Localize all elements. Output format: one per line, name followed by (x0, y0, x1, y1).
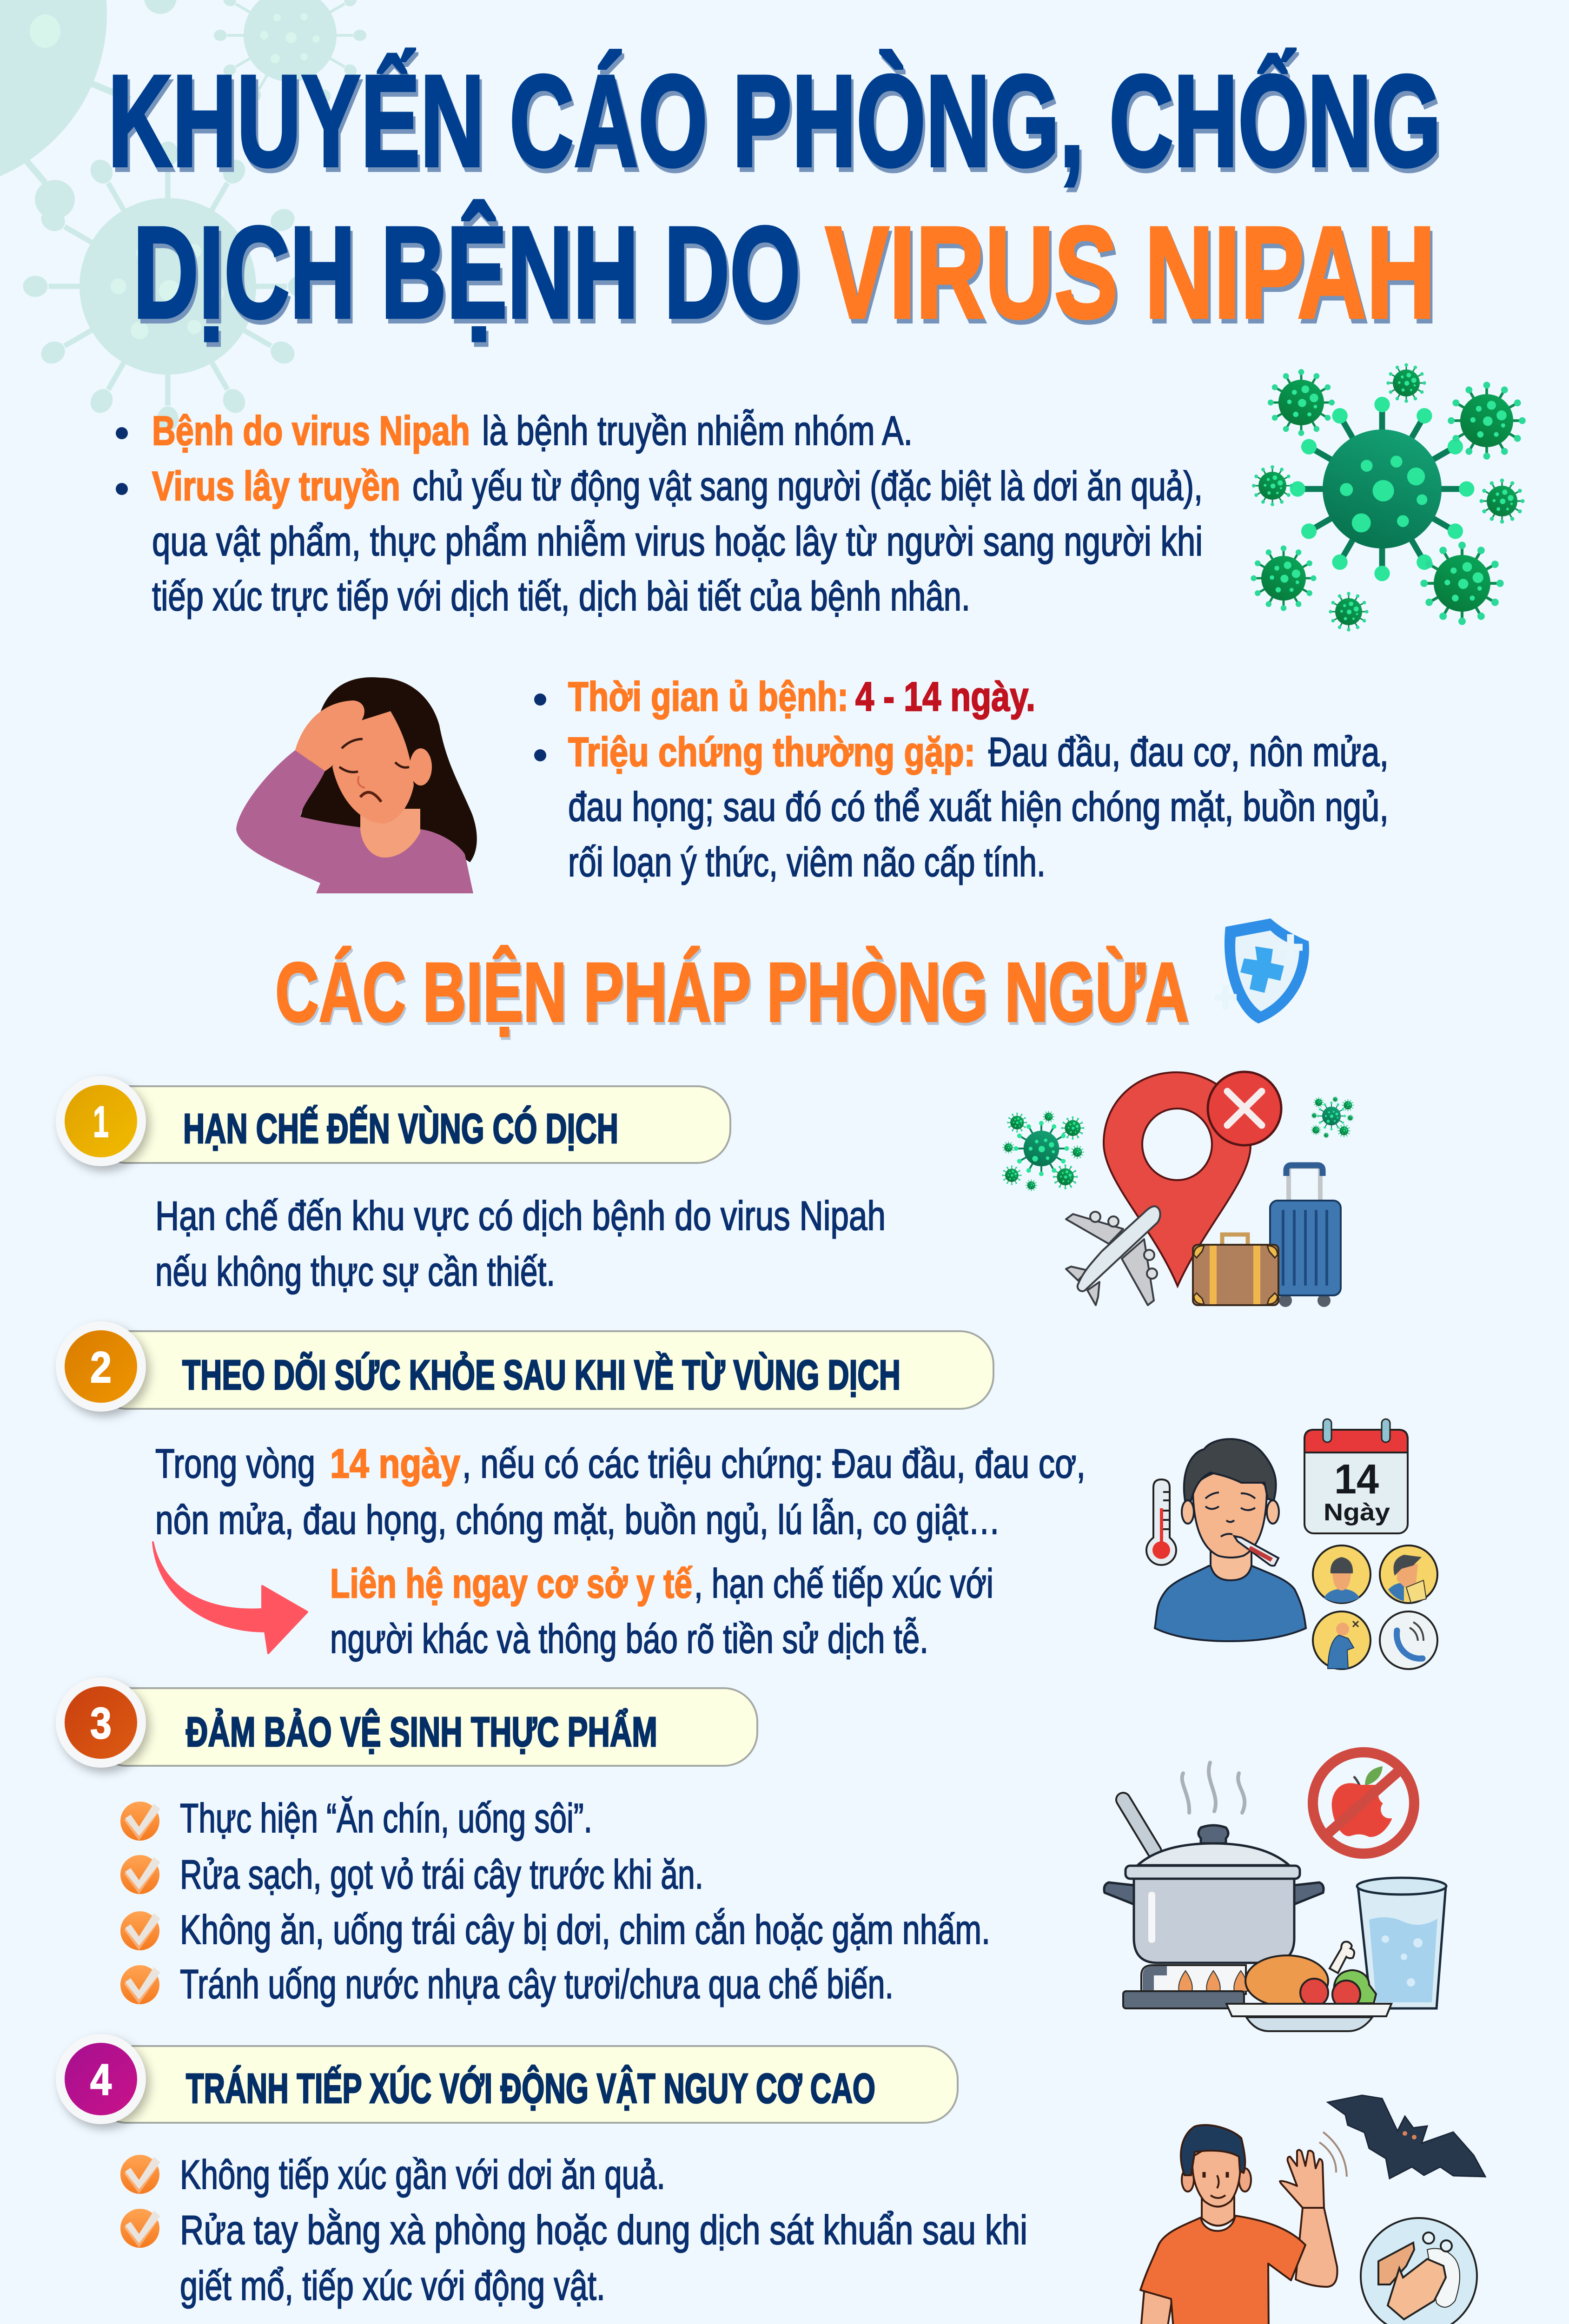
hand-washing icon (1361, 2218, 1477, 2324)
step 3 list: Rửa sạch, gọt vỏ trái cây trước khi ăn. (180, 1851, 703, 1897)
steam (1182, 1763, 1245, 1813)
step 4 header bar (93, 2046, 958, 2123)
step 1 header bar (93, 1086, 730, 1163)
roast chicken plate (1226, 1942, 1391, 2031)
stove (1123, 1965, 1248, 2008)
symptoms text block: Triệu chứng thường gặp: (568, 729, 975, 775)
step 4 list (120, 2152, 1027, 2309)
symptoms text block: rối loạn ý thức, viêm não cấp tính. (568, 839, 1046, 885)
icon: shield (1214, 918, 1309, 1023)
panel: step 1 (56, 1076, 886, 1294)
step 3 badge (56, 1677, 146, 1768)
step 1 badge: 1 (93, 1097, 109, 1147)
step 2 body: 14 ngày (330, 1440, 460, 1486)
bat (1328, 2095, 1485, 2179)
symptoms text block: Thời gian ủ bệnh: (568, 673, 848, 720)
pot (1104, 1825, 1324, 1963)
blue suitcase (1270, 1165, 1341, 1307)
step 3 list: Tránh uống nước nhựa cây tươi/chưa qua chế biến. (180, 1961, 894, 2007)
step 2 action text: , hạn chế tiếp xúc với (694, 1560, 993, 1606)
icon: virus cluster (1251, 363, 1526, 632)
symptoms text block: đau họng; sau đó có thể xuất hiện chóng mặt, buồn ngủ, (568, 784, 1389, 830)
step 4 list: Rửa tay bằng xà phòng hoặc dung dịch sát khuẩn sau khi (180, 2207, 1027, 2253)
step 4 heading: TRÁNH TIẾP XÚC VỚI ĐỘNG VẬT NGUY CƠ CAO (186, 2065, 875, 2112)
intro text block: tiếp xúc trực tiếp với dịch tiết, dịch bài tiết của bệnh nhân. (152, 573, 970, 619)
step 2 heading: THEO DÕI SỨC KHỎE SAU KHI VỀ TỪ VÙNG DỊCH (182, 1351, 900, 1399)
step 2 action text (330, 1560, 993, 1662)
step 3 badge: 3 (90, 1699, 112, 1748)
step 2 action text: người khác và thông báo rõ tiền sử dịch tễ. (330, 1616, 928, 1662)
intro text block: là bệnh truyền nhiễm nhóm A. (482, 408, 913, 454)
symptom icon: headache (1313, 1545, 1370, 1603)
brown suitcase (1193, 1235, 1278, 1305)
calendar: Ngày (1324, 1499, 1390, 1526)
step 1 body: Hạn chế đến khu vực có dịch bệnh do virus Nipah (155, 1193, 886, 1239)
location pin (1104, 1072, 1251, 1286)
symptoms text block: 4 - 14 ngày. (855, 673, 1035, 720)
symptom icon: dizziness (1313, 1611, 1370, 1669)
panel: step 4 (56, 2034, 1027, 2309)
step 3 header bar (93, 1688, 757, 1766)
intro text block: Virus lây truyền (152, 463, 400, 509)
illustration: woman with headache (236, 677, 477, 893)
illustration: sick man, calendar and symptoms (1146, 1419, 1437, 1669)
forbidden mark (1208, 1072, 1281, 1145)
background virus decoration (0, 0, 366, 431)
step 3 heading: ĐẢM BẢO VỆ SINH THỰC PHẨM (186, 1708, 657, 1756)
step 1 badge (56, 1076, 146, 1166)
illustration: man waving, bat and hand washing (1140, 2095, 1485, 2324)
step 3 list: Không ăn, uống trái cây bị dơi, chim cắn hoặc gặm nhấm. (180, 1907, 990, 1953)
step 4 badge: 4 (90, 2055, 112, 2105)
waving man (1140, 2125, 1337, 2324)
step 2 body: Trong vòng (155, 1440, 315, 1486)
thermometer (1146, 1479, 1176, 1565)
step 2 body: nôn mửa, đau họng, chóng mặt, buồn ngủ, lú lẫn, co giật… (155, 1497, 1000, 1543)
calendar (1304, 1419, 1408, 1533)
step 4 list: Không tiếp xúc gần với dơi ăn quả. (180, 2152, 665, 2198)
icon: phone call (1380, 1611, 1437, 1669)
step 2 badge: 2 (90, 1343, 112, 1392)
no-apple sign (1313, 1752, 1414, 1854)
wave marks (1319, 2132, 1347, 2177)
intro text block: Bệnh do virus Nipah (152, 408, 470, 454)
mini virus clusters (1002, 1096, 1354, 1191)
sick man (1155, 1439, 1306, 1641)
ladle (1123, 1800, 1154, 1851)
step 3 list: Thực hiện “Ăn chín, uống sôi”. (180, 1795, 592, 1841)
illustration: location pin, plane and luggage (1002, 1072, 1354, 1307)
panel: step 2 (56, 1321, 1086, 1662)
title: DỊCH BỆNH DO (133, 199, 801, 345)
step 3 list (120, 1795, 990, 2007)
step 1 heading: HẠN CHẾ ĐẾN VÙNG CÓ DỊCH (183, 1105, 618, 1152)
step 2 header bar (93, 1331, 993, 1409)
plane (1066, 1206, 1160, 1305)
step 2 action text: Liên hệ ngay cơ sở y tế (330, 1560, 693, 1606)
title (108, 47, 1441, 345)
symptoms text block: Đau đầu, đau cơ, nôn mửa, (988, 729, 1389, 775)
symptom icon: vomiting (1380, 1545, 1437, 1603)
step 1 body: nếu không thực sự cần thiết. (155, 1248, 555, 1294)
symptoms text block (534, 673, 1389, 885)
water glass (1357, 1878, 1446, 2008)
step 4 list: giết mổ, tiếp xúc với động vật. (180, 2263, 605, 2309)
illustration: cooking pot, food and water (1104, 1752, 1446, 2031)
intro text block: qua vật phẩm, thực phẩm nhiễm virus hoặc lây từ người sang người khi (152, 518, 1203, 564)
step 4 badge (56, 2034, 146, 2124)
intro text block (116, 408, 1203, 619)
arrow (153, 1542, 307, 1653)
calendar: 14 (1334, 1456, 1379, 1503)
panel: step 3 (56, 1677, 990, 2007)
step 2 body (155, 1440, 1086, 1543)
step 1 body (155, 1193, 886, 1294)
intro text block: chủ yếu từ động vật sang người (đặc biệt là dơi ăn quả), (412, 463, 1203, 509)
step 2 badge (56, 1321, 146, 1412)
step 2 body: , nếu có các triệu chứng: Đau đầu, đau cơ, (462, 1440, 1086, 1486)
heading: prevention measures: CÁC BIỆN PHÁP PHÒNG NGỪA (275, 945, 1189, 1039)
